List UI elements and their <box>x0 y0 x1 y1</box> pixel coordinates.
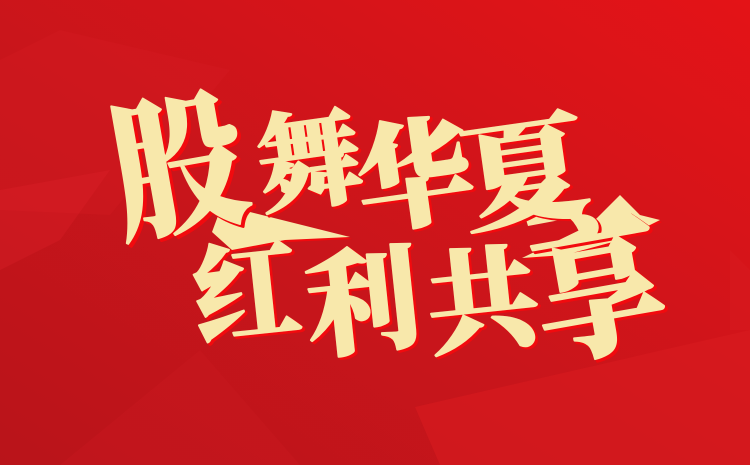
character: 利: 利 <box>302 237 429 376</box>
character: 共: 共 <box>423 237 552 372</box>
character: 红: 红 <box>187 231 305 358</box>
character: 舞: 舞 <box>251 99 372 230</box>
character: 夏: 夏 <box>455 105 599 250</box>
flourish: 夏 tail <box>520 200 592 226</box>
flourish: 享 top stroke <box>524 197 662 260</box>
character: 夏: 夏 <box>453 103 597 248</box>
character: 享: 享 <box>522 199 677 386</box>
character: 红: 红 <box>190 233 307 360</box>
brush flourishes <box>212 195 662 260</box>
title line 2: 红利共享 <box>187 199 680 388</box>
flourish: 股 tail <box>214 207 352 252</box>
character: 享: 享 <box>524 201 680 388</box>
character: 利: 利 <box>300 236 426 374</box>
title line 1: 股舞华夏 <box>99 77 599 266</box>
character: 舞: 舞 <box>248 98 370 228</box>
character: 股: 股 <box>102 80 263 265</box>
character: 华: 华 <box>348 107 481 250</box>
character: 共: 共 <box>421 235 550 371</box>
character: 股: 股 <box>99 77 260 263</box>
character: 华: 华 <box>351 109 483 252</box>
